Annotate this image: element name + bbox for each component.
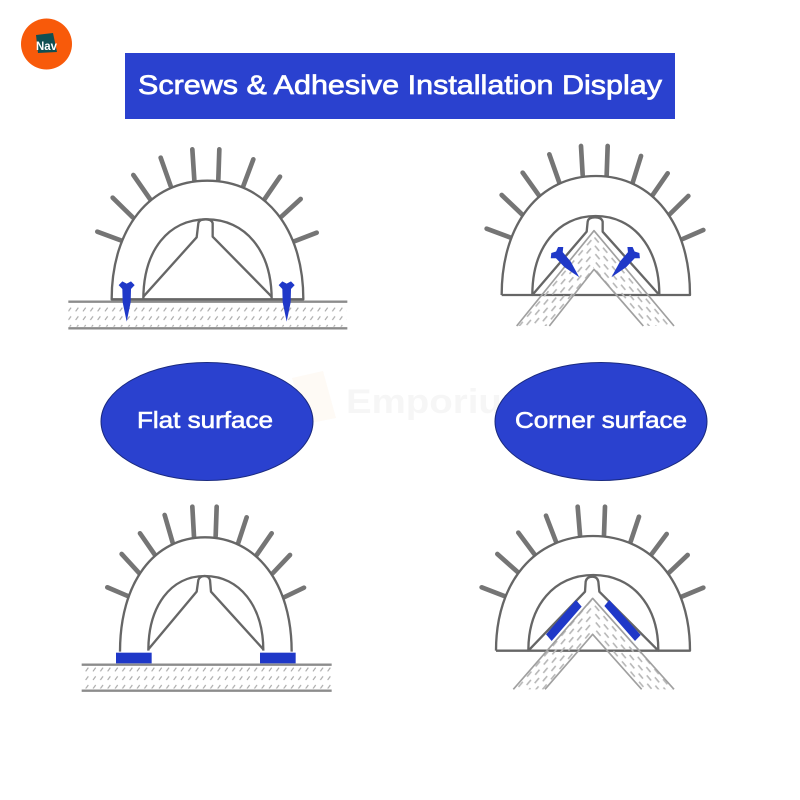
logo: Nav — [36, 41, 58, 53]
ellipse label: corner surface — [495, 362, 707, 480]
title banner: Screws & Adhesive Installation Display — [138, 70, 663, 100]
diagram: flat surface with screws — [68, 149, 347, 328]
title banner — [125, 53, 675, 119]
watermark — [292, 371, 536, 424]
ellipse label: flat surface — [101, 362, 313, 480]
ellipse label: flat surface: Flat surface — [137, 407, 273, 433]
ellipse label: corner surface: Corner surface — [515, 407, 687, 433]
diagram: corner surface with adhesive — [482, 507, 703, 689]
diagram: flat surface with adhesive — [82, 507, 332, 691]
logo — [21, 18, 72, 70]
diagram: corner surface with screws — [487, 146, 703, 326]
watermark: Emporium — [346, 383, 536, 421]
